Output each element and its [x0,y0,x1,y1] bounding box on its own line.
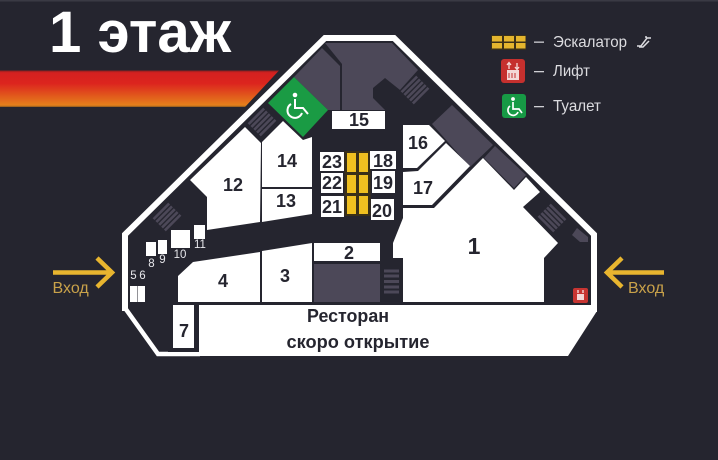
room 15 [332,110,385,130]
title: 1 этаж [49,0,232,65]
shop 19: 19 [373,173,393,193]
service room top left [294,48,340,110]
service room right [432,105,493,167]
restaurant [199,305,597,356]
lower-left outline [125,308,200,354]
room 14 [262,121,312,187]
restaurant: скоро открытие [286,332,430,352]
stairs top left [249,109,275,135]
service room below 2 [314,264,380,302]
legend: toilet [502,94,602,118]
shop 11: 11 [194,239,206,251]
room 17: 17 [413,178,433,198]
small lift icon [573,288,588,303]
shop 18: 18 [373,151,393,171]
shop 22: 22 [322,173,342,193]
room 2: 2 [344,243,354,263]
shop 8 [146,242,156,270]
left entrance arrow: Вход [52,280,89,297]
restaurant: Ресторан [307,306,389,326]
room 7: 7 [179,321,189,341]
shop 10: 10 [174,249,186,261]
room 13 [262,189,312,222]
stairs right [539,205,565,231]
room 15: 15 [349,110,369,130]
legend: escalator: Эскалатор [553,34,627,51]
room 12: 12 [223,175,243,195]
stairs left [154,204,180,230]
shop 20: 20 [372,201,392,221]
legend [491,34,651,118]
stairs bottom [384,271,399,292]
toilet diamond [268,77,328,137]
service room top right [325,43,418,110]
room 4 [178,252,260,302]
right entrance arrow [606,258,665,297]
shops 5 and 6: 5 [130,270,137,282]
escalators centre [344,151,370,216]
shop 8: 8 [148,258,155,270]
room 16 [403,125,445,168]
room 3: 3 [280,266,290,286]
legend: lift [501,59,591,83]
shop 10 [171,230,190,261]
room 13: 13 [276,191,296,211]
room 7 [168,304,199,352]
room 4: 4 [218,271,228,291]
right entrance arrow: Вход [628,280,665,297]
shop 21: 21 [322,197,342,217]
shops 5 and 6 [130,270,146,302]
legend: escalator [491,34,651,51]
orange-red band [0,70,279,107]
stairs top right [402,77,428,103]
room 3 [262,243,312,302]
shop 9: 9 [159,254,166,266]
left entrance arrow [52,258,112,297]
shop 9 [158,240,167,266]
room 2 [314,243,380,263]
room 12 [190,127,261,230]
room 1: 1 [468,233,481,259]
legend: toilet: Туалет [553,98,602,115]
building outline [125,38,594,312]
legend: lift: Лифт [553,63,591,80]
shop 11 [194,225,206,251]
service room far right [572,228,588,242]
service room right small [484,146,526,188]
shop 23: 23 [322,152,342,172]
shops 5 and 6: 6 [139,270,146,282]
room 17 [403,143,470,205]
room 1 [393,158,558,302]
floor plan [125,38,597,356]
room 16: 16 [408,133,428,153]
room 14: 14 [277,151,297,171]
